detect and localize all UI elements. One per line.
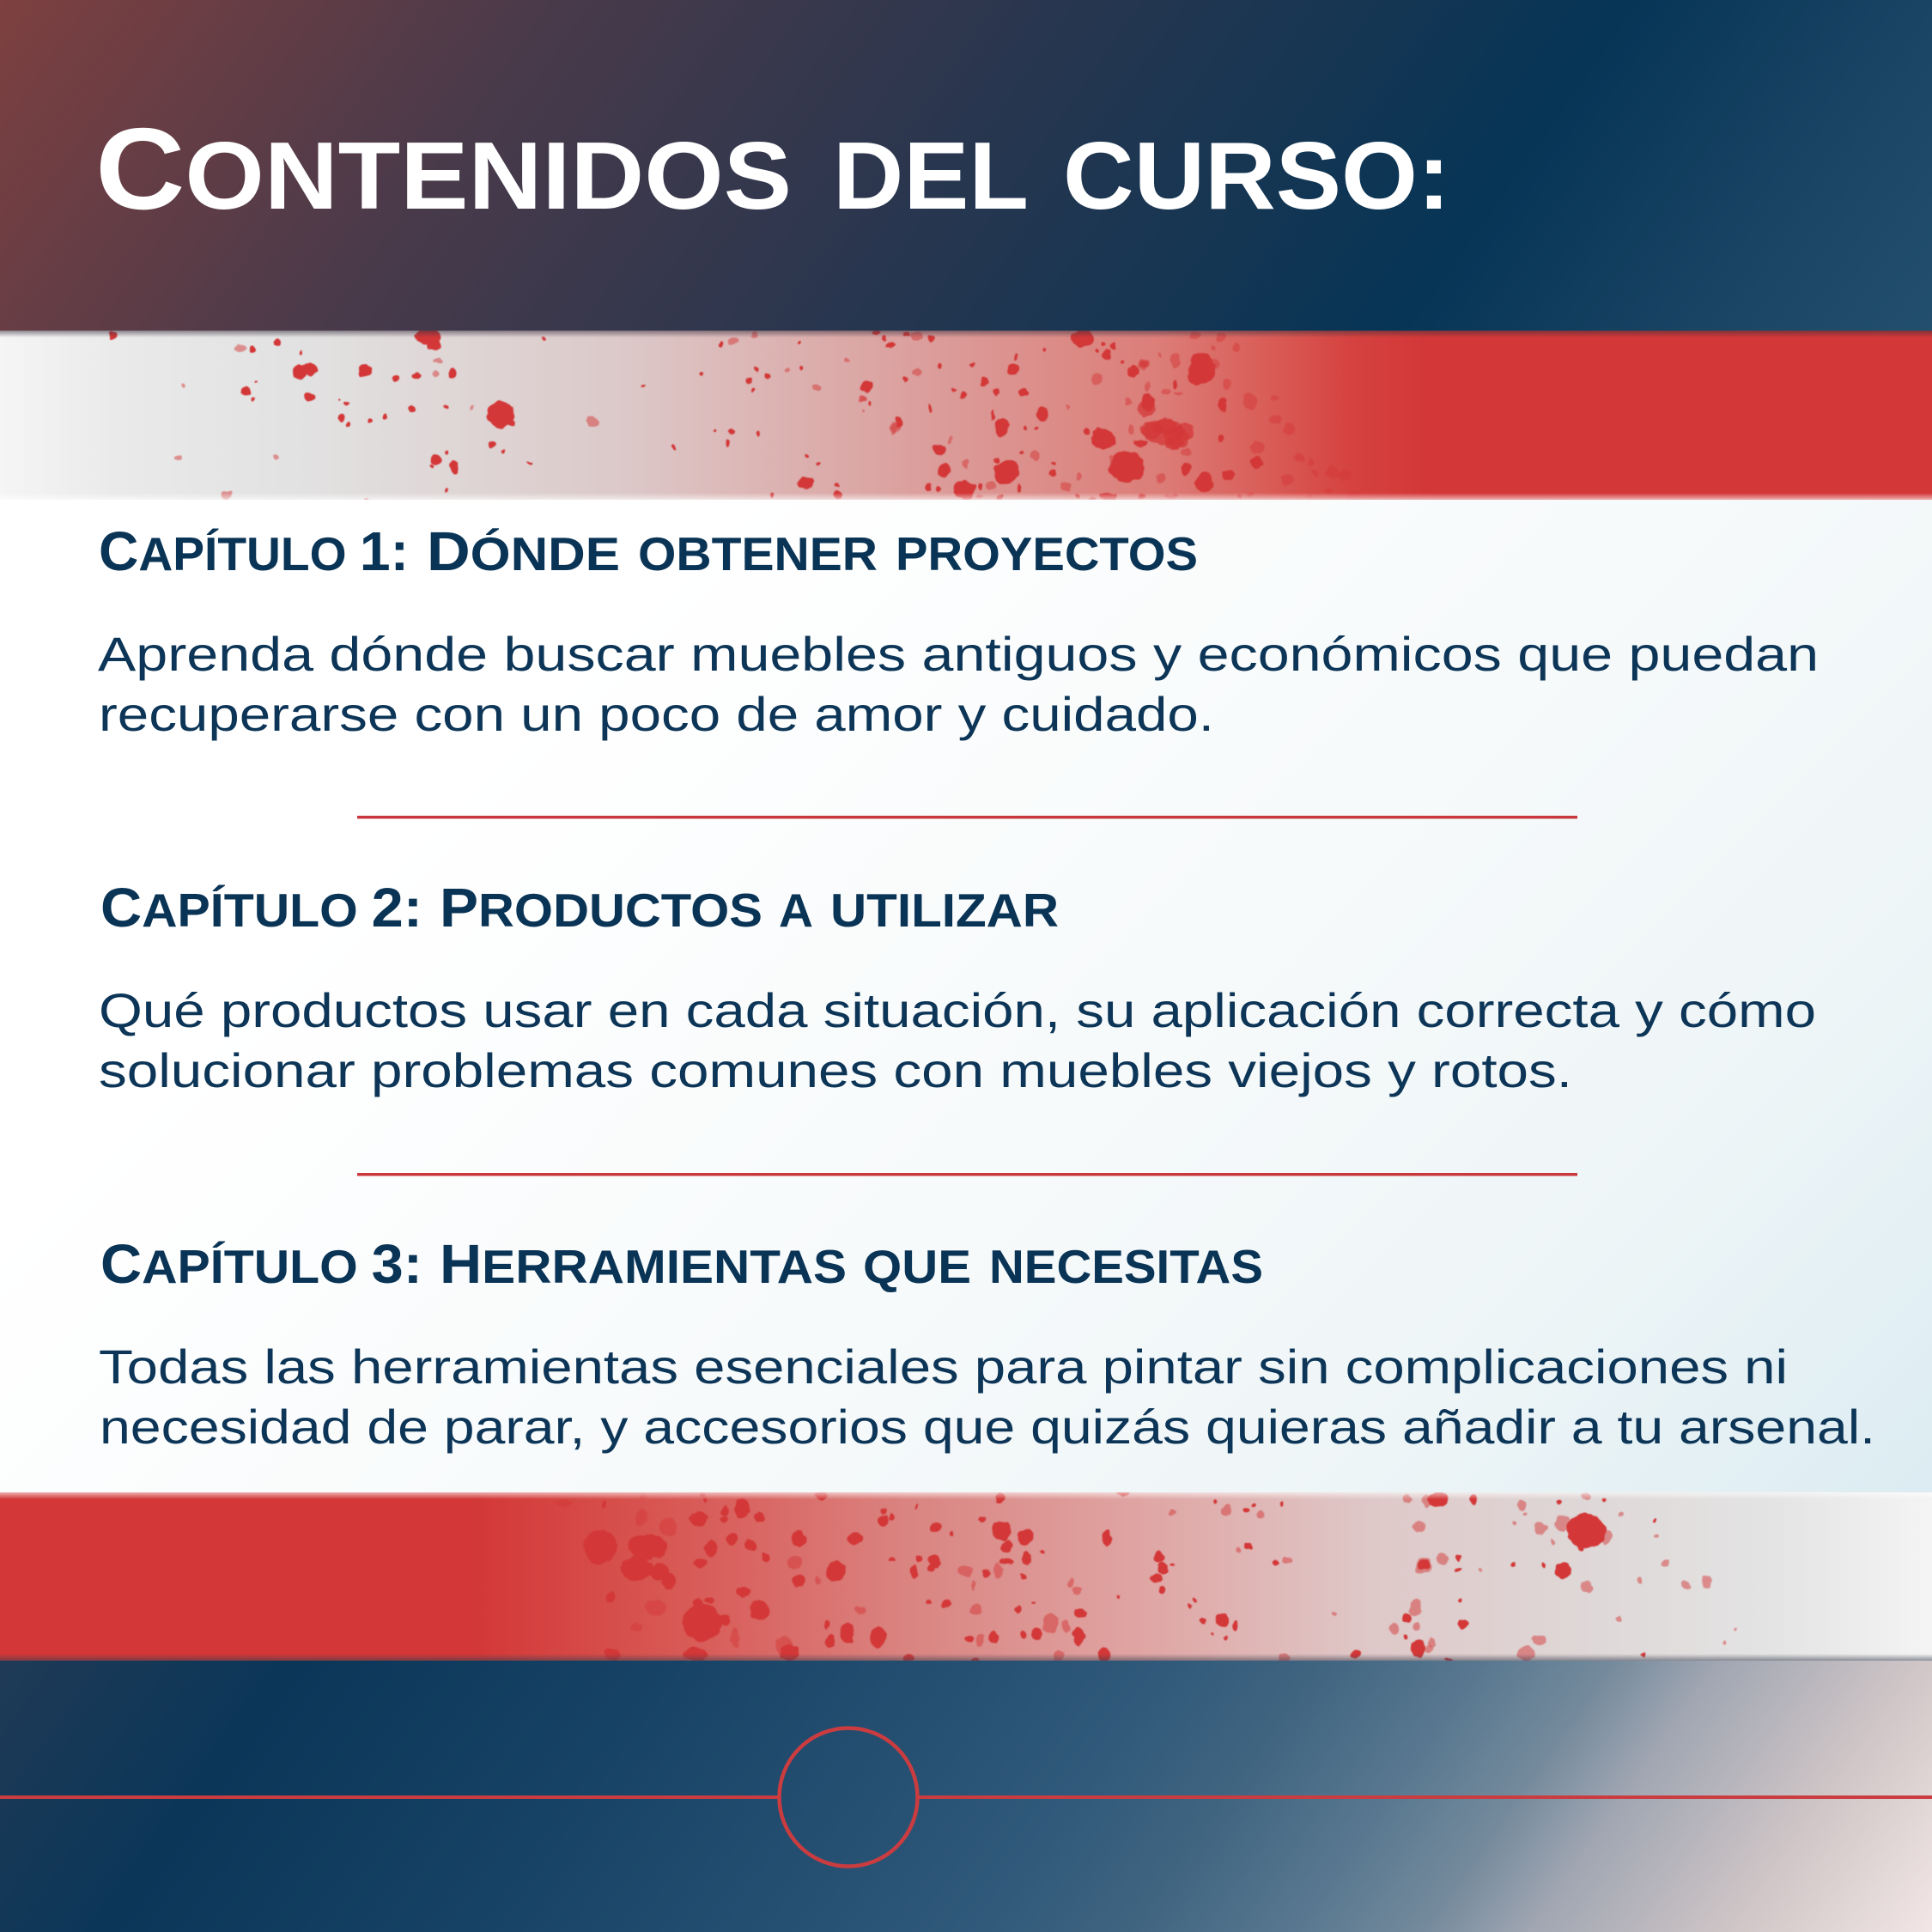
top paint band background [0, 331, 1932, 500]
chapter 2 heading: PRODUCTOS [440, 877, 762, 939]
chapter 3 description: necesidad de parar, y accesorios que quizás quieras añadir a tu arsenal. [100, 1400, 1875, 1454]
footer background [0, 1661, 1932, 1932]
chapter 3 [99, 1233, 1875, 1454]
chapter 2 heading [100, 877, 1059, 939]
title: CURSO: [1063, 123, 1450, 229]
chapter 2 [99, 877, 1816, 1097]
chapter 3 heading: CAPÍTULO 3: [100, 1233, 422, 1295]
paint splatter: top band [109, 329, 1359, 501]
chapter 2 description: solucionar problemas comunes con muebles viejos y rotos. [99, 1043, 1572, 1097]
chapter 1 heading: DÓNDE [427, 520, 620, 582]
chapter 1 heading: PROYECTOS [896, 527, 1198, 580]
chapter 3 description: Todas las herramientas esenciales para pintar sin complicaciones ni [99, 1340, 1788, 1394]
chapter 3 heading: HERRAMIENTAS [440, 1233, 847, 1295]
footer line with circle [0, 1728, 1932, 1867]
title: CONTENIDOS [95, 104, 792, 234]
chapter 1 description: Aprenda dónde buscar muebles antiguos y económicos que puedan [98, 627, 1819, 681]
chapter 1 heading: CAPÍTULO 1: [99, 520, 409, 582]
title: DEL [833, 123, 1029, 229]
chapter 1 heading [99, 520, 1198, 582]
main content background [0, 500, 1932, 1492]
divider 2 [357, 1173, 1577, 1176]
chapter 3 description [99, 1340, 1875, 1454]
chapter 1 [98, 520, 1819, 741]
chapter 3 heading: QUE [863, 1240, 971, 1293]
chapter 2 heading: A [779, 884, 813, 937]
chapter 3 heading [100, 1233, 1263, 1295]
bottom paint band background [0, 1492, 1932, 1661]
chapter 1 heading: OBTENER [638, 527, 878, 580]
chapter 1 description [98, 627, 1819, 741]
paint splatter: bottom band [555, 1492, 1736, 1662]
chapter 1 description: recuperarse con un poco de amor y cuidado. [99, 687, 1214, 741]
chapter 2 description [99, 983, 1816, 1097]
chapter 2 heading: UTILIZAR [830, 884, 1059, 937]
chapter 2 description: Qué productos usar en cada situación, su aplicación correcta y cómo [99, 983, 1816, 1037]
chapter 2 heading: CAPÍTULO 2: [100, 877, 422, 939]
header background [0, 0, 1932, 331]
chapter 3 heading: NECESITAS [989, 1240, 1263, 1293]
divider 1 [357, 816, 1577, 819]
title [95, 104, 1450, 234]
